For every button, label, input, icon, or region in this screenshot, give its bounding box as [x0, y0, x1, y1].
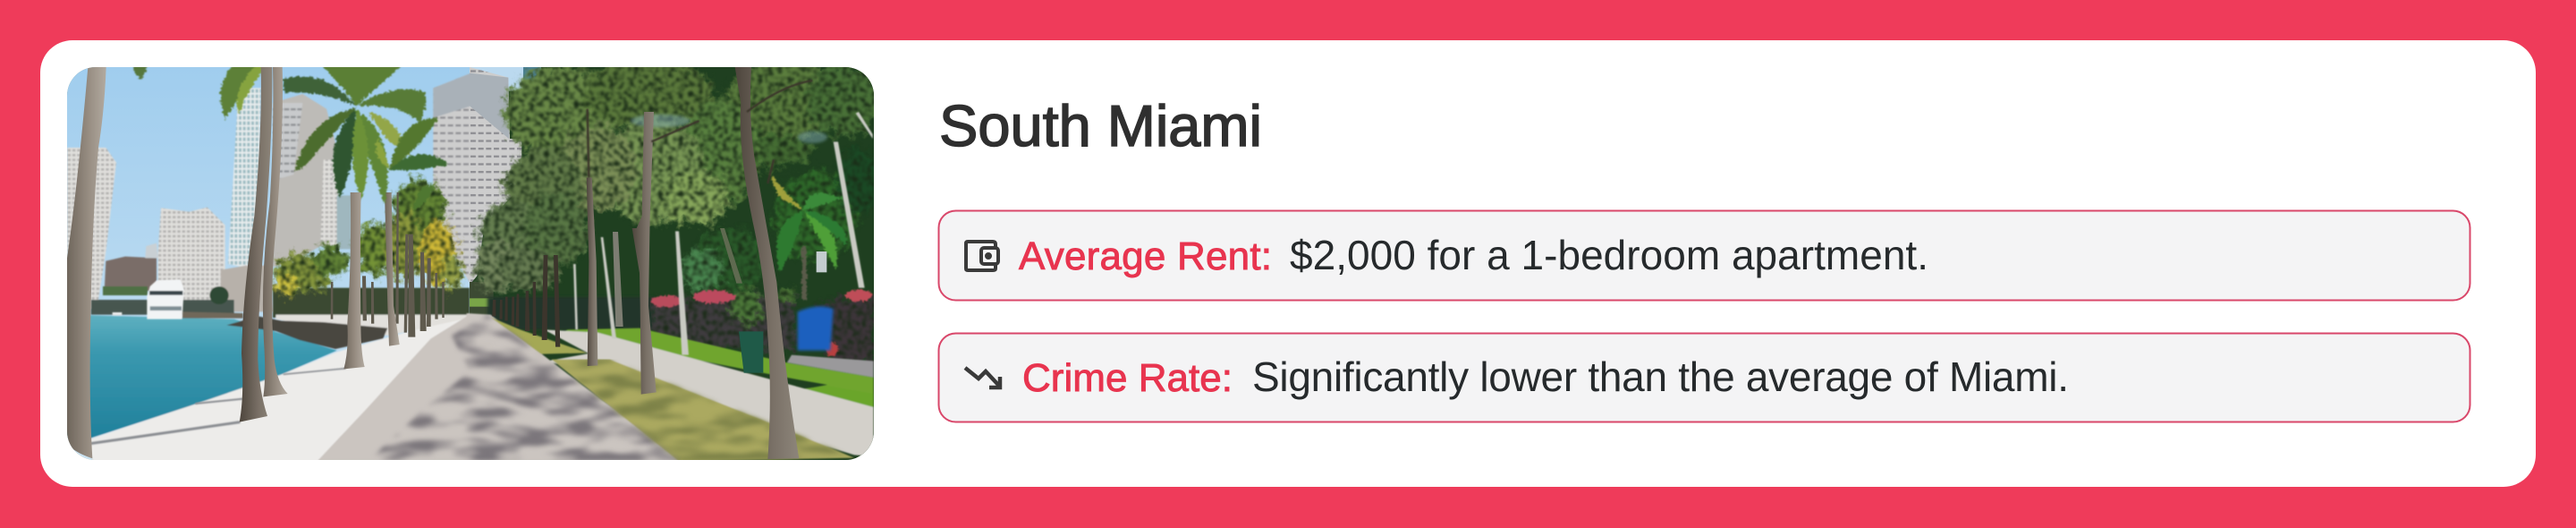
trash bin [739, 331, 763, 373]
grass and paths [467, 313, 874, 461]
panel: crime rate [939, 333, 2470, 422]
label: crime rate: Crime Rate: [1022, 356, 1233, 400]
value: crime rate: Significantly lower than the average of Miami. [1252, 353, 2069, 400]
icon: wallet [966, 242, 998, 270]
palm in back [771, 175, 847, 300]
dappled shade on grass [571, 360, 841, 460]
street sign [817, 251, 826, 272]
background jungle [682, 148, 878, 294]
palm crowns [133, 64, 449, 210]
photo: palm-lined waterfront walkway in South Miami [67, 61, 878, 461]
sky gaps in canopy [631, 115, 827, 143]
boat [113, 279, 184, 319]
dappled shade on path [369, 315, 682, 461]
ground dark band [487, 297, 655, 329]
panel: average rent [939, 211, 2470, 301]
value: average rent: $2,000 for a 1-bedroom apartment. [1290, 232, 1928, 278]
light poles [573, 112, 873, 355]
hedge and flowers [651, 288, 874, 362]
parked blue car [798, 306, 834, 351]
icon: trend down arrow [965, 368, 1000, 387]
photo left half: skyline, water and palms [67, 64, 472, 461]
palm trunks [67, 67, 106, 458]
photo right half: trees, lawn and sidewalk [369, 61, 878, 461]
far palm row [273, 181, 462, 294]
tree trunks [492, 255, 560, 347]
heading: South Miami [939, 93, 1262, 158]
label: average rent: Average Rent: [1019, 234, 1272, 278]
canopy [476, 61, 878, 294]
